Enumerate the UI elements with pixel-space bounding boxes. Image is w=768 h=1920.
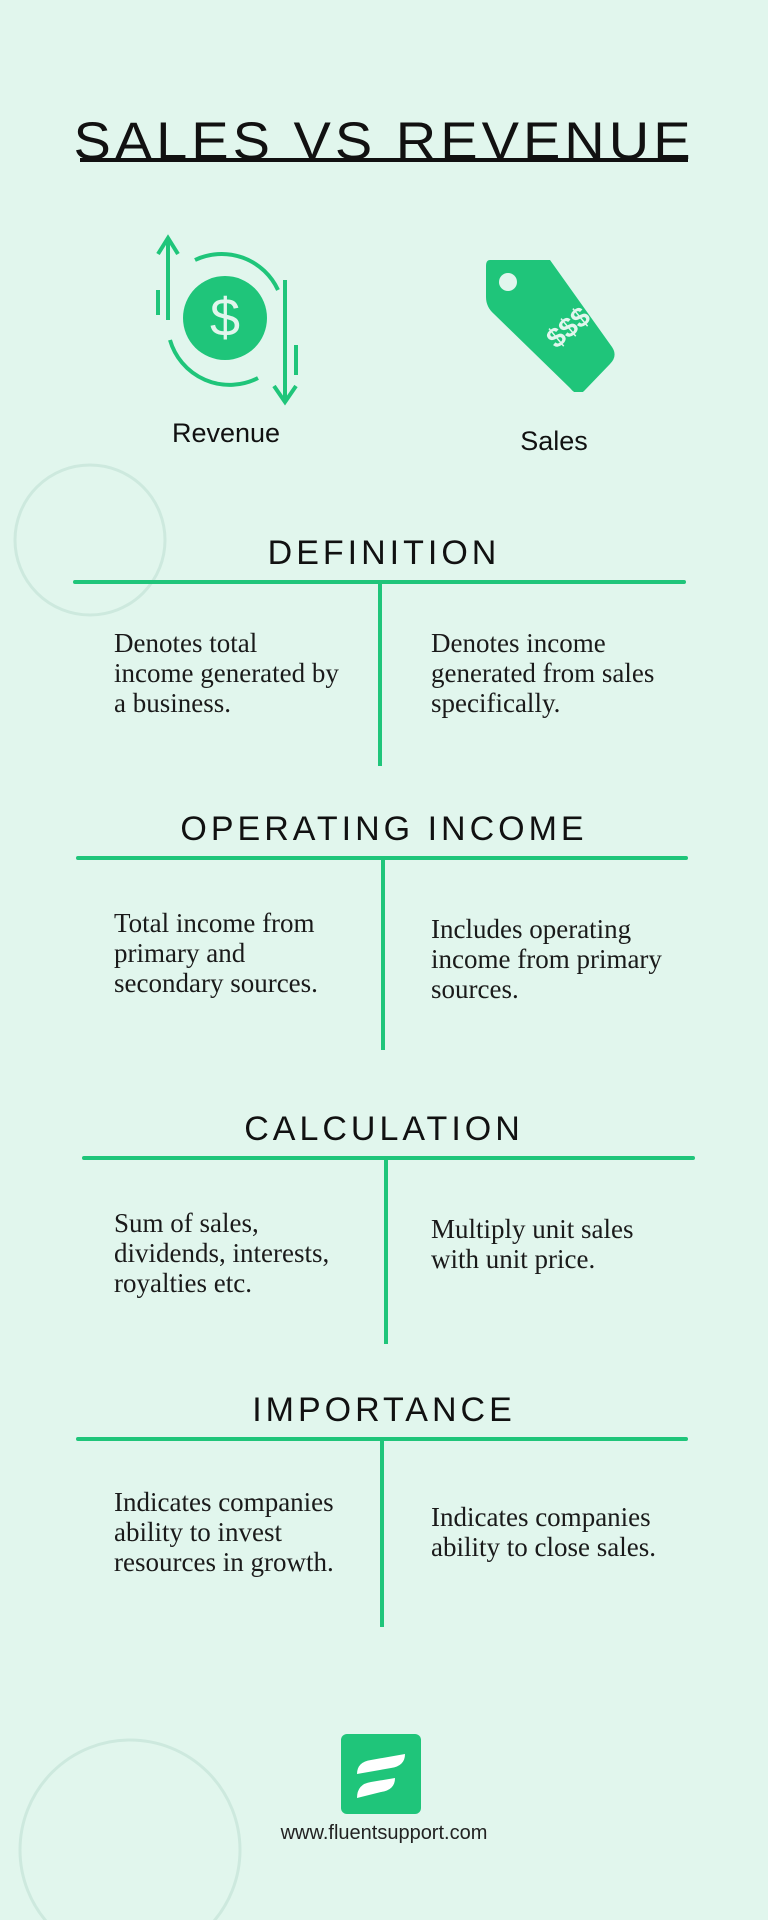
title: SALES VS REVENUE — [73, 111, 695, 170]
text: revenue importance: ability to invest — [114, 1517, 282, 1547]
text: sales definition: generated from sales — [431, 658, 654, 688]
text: sales operating: income from primary — [431, 944, 662, 974]
text: sales operating: sources. — [431, 974, 519, 1004]
heading: CALCULATION — [244, 1110, 524, 1148]
icon: revenue: $ — [210, 288, 240, 348]
text: sales definition: Denotes income — [431, 628, 606, 658]
text: revenue calculation — [114, 1208, 329, 1298]
text: sales importance — [431, 1502, 656, 1562]
text: sales importance: ability to close sales. — [431, 1532, 656, 1562]
icon: revenue — [156, 234, 298, 406]
title underline — [80, 158, 688, 162]
text: revenue calculation: Sum of sales, — [114, 1208, 259, 1238]
text: revenue importance: resources in growth. — [114, 1547, 334, 1577]
text: revenue definition: a business. — [114, 688, 231, 718]
text: revenue calculation: dividends, interests, — [114, 1238, 329, 1268]
text: sales calculation: with unit price. — [431, 1244, 595, 1274]
text: revenue importance — [114, 1487, 334, 1577]
text: sales operating: Includes operating — [431, 914, 631, 944]
text: revenue operating — [114, 908, 318, 998]
heading: IMPORTANCE — [252, 1391, 516, 1429]
text: sales importance: Indicates companies — [431, 1502, 651, 1532]
heading: OPERATING INCOME — [180, 810, 588, 848]
text: sales definition — [431, 628, 654, 718]
text: sales operating — [431, 914, 662, 1004]
text: sales calculation — [431, 1214, 634, 1274]
heading: DEFINITION — [268, 534, 500, 572]
text: revenue definition: Denotes total — [114, 628, 257, 658]
text: revenue definition: income generated by — [114, 658, 339, 688]
logo — [341, 1734, 421, 1814]
label: sales: Sales — [520, 426, 588, 456]
section: operating income — [76, 810, 688, 1050]
icon: sales tag: $$$ — [540, 300, 596, 354]
section: calculation — [82, 1110, 695, 1344]
text: sales definition: specifically. — [431, 688, 560, 718]
section: importance — [76, 1391, 688, 1627]
text: revenue operating: Total income from — [114, 908, 315, 938]
label: revenue: Revenue — [172, 418, 280, 448]
text: revenue operating: primary and — [114, 938, 245, 968]
icon: sales tag — [486, 260, 615, 392]
section: definition — [73, 534, 686, 766]
text: revenue operating: secondary sources. — [114, 968, 318, 998]
text: revenue definition — [114, 628, 339, 718]
text: revenue calculation: royalties etc. — [114, 1268, 252, 1298]
text: revenue importance: Indicates companies — [114, 1487, 334, 1517]
text: sales calculation: Multiply unit sales — [431, 1214, 634, 1244]
url: www.fluentsupport.com — [281, 1822, 487, 1844]
